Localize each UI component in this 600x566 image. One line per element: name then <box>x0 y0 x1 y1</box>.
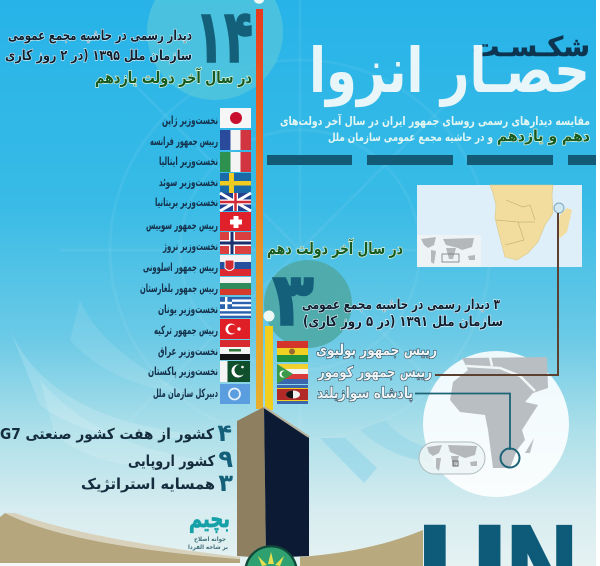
logo: جوانه اصلاح <box>194 536 226 543</box>
label: Eswatini: پادشاه سوازیلند <box>317 384 413 403</box>
flag: Japan <box>220 108 251 128</box>
item: strategic neighbours: همسایه استراتژیک <box>81 475 215 493</box>
label: Switzerland: رییس جمهور سوییس <box>146 218 218 233</box>
building <box>237 407 309 558</box>
flag: Norway <box>220 232 251 254</box>
item: G7 <box>0 419 232 447</box>
heading: tenth government: در سال آخر دولت دهم <box>267 238 403 258</box>
summary list <box>0 419 233 497</box>
flag: Eswatini <box>277 385 308 404</box>
flag: Slovakia <box>220 255 251 276</box>
circle behind 3 <box>264 260 352 348</box>
text: 3 visits <box>302 297 503 330</box>
item: strategic neighbours <box>81 469 233 497</box>
UN letters <box>418 520 577 566</box>
label: United Nations: دبیرکل سازمان ملل <box>153 386 218 400</box>
label: Sweden: نخست‌وزیر سوئد <box>159 175 218 190</box>
item: European: ۹ <box>218 445 233 473</box>
subtitle: دهم و یازدهم <box>497 127 590 145</box>
label: Iraq: نخست‌وزیر عراق <box>158 344 218 359</box>
label: UK: نخست‌وزیر بریتانیا <box>155 195 218 210</box>
circle behind 14 <box>147 0 283 100</box>
connector: Eswatini <box>415 394 510 450</box>
label: Pakistan: نخست‌وزیر پاکستان <box>148 364 218 379</box>
flag: France <box>220 130 251 150</box>
label: Comoros: رییس جمهور کومور <box>317 363 432 381</box>
subtitle: و در حاشیه مجمع عمومی سازمان ملل <box>328 130 493 145</box>
marker: Eswatini <box>500 448 520 468</box>
label: Norway: نخست‌وزیر نروژ <box>162 239 218 254</box>
globe with Africa <box>419 351 569 497</box>
text: 3 visits: ۳ دیدار رسمی در حاشیه مجمع عمومی <box>302 297 500 313</box>
flag: Comoros <box>277 364 308 384</box>
flag list: left column <box>140 108 251 404</box>
map inset: world <box>417 235 481 267</box>
flag: UK <box>220 193 251 211</box>
logo: بچیم <box>189 505 230 533</box>
ground: left <box>0 513 240 563</box>
item: European: کشور اروپایی <box>128 452 215 471</box>
heading: eleventh government: در سال آخر دولت یازدهم <box>95 67 252 87</box>
globe inset: world <box>419 442 485 474</box>
label: Bolivia: رییس جمهور بولیوی <box>316 341 437 359</box>
logo <box>188 505 230 551</box>
flag: Switzerland <box>220 212 251 231</box>
subtitle <box>280 113 590 145</box>
timeline bars <box>254 0 274 410</box>
label: France: رییس جمهور فرانسه <box>150 134 218 149</box>
label: Japan: نخست‌وزیر ژاپن <box>162 113 218 128</box>
text: 3 visits: سازمان ملل ۱۳۹۱ (در ۵ روز کاری) <box>303 314 503 330</box>
flag: Italy <box>220 152 251 172</box>
connector: Comoros <box>435 213 558 375</box>
item: G7: کشور از هفت کشور صنعتی G7 <box>0 425 214 443</box>
label: Greece: نخست‌وزیر یونان <box>158 302 218 317</box>
flag: United Nations <box>220 384 250 404</box>
flag: Turkey <box>220 319 250 339</box>
label: Turkey: رییس جمهور ترکیه <box>154 323 218 338</box>
flag: Greece <box>220 297 251 318</box>
number 3: ۳ <box>272 257 314 343</box>
item: strategic neighbours: ۳ <box>218 469 233 497</box>
text: 14 visits <box>5 28 192 64</box>
text: 14 visits: سازمان ملل ۱۳۹۵ (در ۲ روز کاری <box>5 48 192 64</box>
label: Slovakia: رییس جمهور اسلوونی <box>143 260 218 275</box>
flag: Bolivia <box>277 341 308 362</box>
flag: Bulgaria <box>220 277 251 295</box>
flag list: right column <box>277 341 437 404</box>
label: Italy: نخست‌وزیر ایتالیا <box>159 154 218 169</box>
ground: right <box>300 530 423 566</box>
title: small: شکـسـت <box>472 32 590 63</box>
logo: بر شاخه الفردا <box>188 544 228 551</box>
label: Bulgaria: رییس جمهور بلغارستان <box>140 281 218 296</box>
flag: Sweden <box>220 173 251 193</box>
emblem: sun <box>245 545 297 566</box>
item: G7: ۴ <box>217 419 232 447</box>
item: European <box>128 445 233 473</box>
flag: Pakistan <box>220 361 250 382</box>
text: 14 visits: دیدار رسمی در حاشیه مجمع عمومی <box>8 28 192 44</box>
map: Comoros region <box>417 185 582 267</box>
flag: Iraq <box>220 340 250 360</box>
